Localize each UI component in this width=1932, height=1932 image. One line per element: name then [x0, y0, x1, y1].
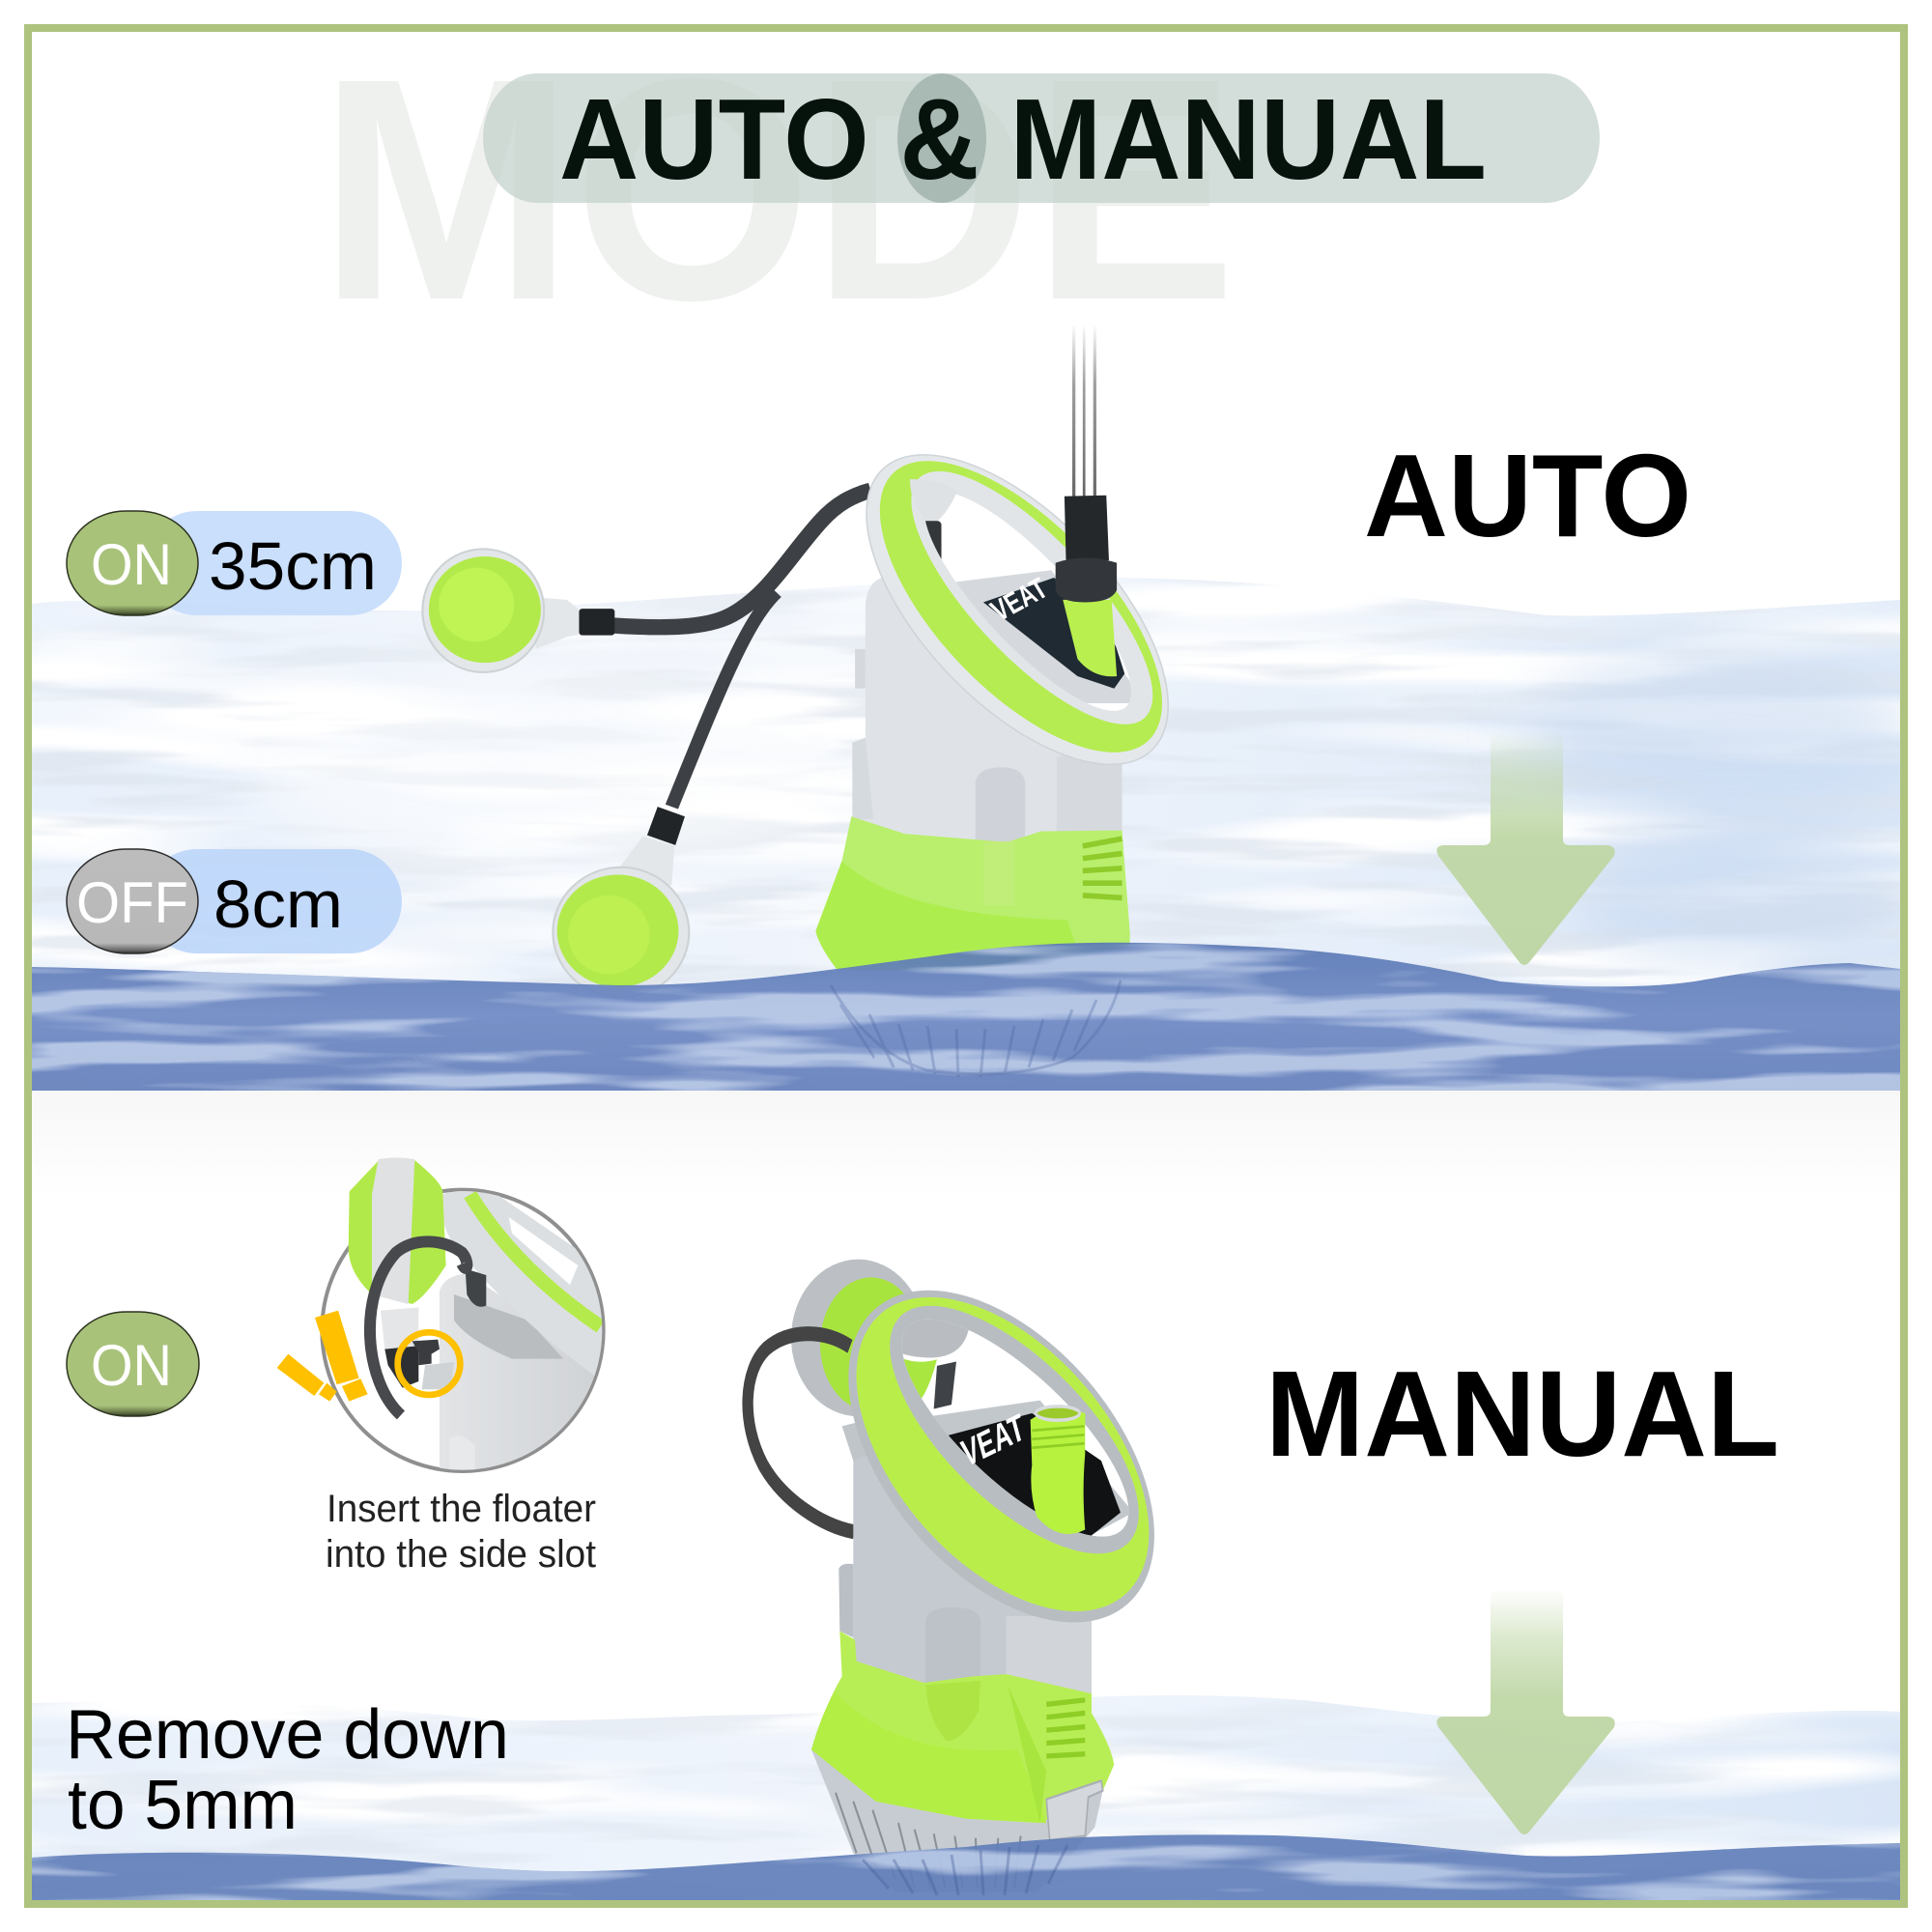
- inset contents: [440, 1190, 606, 1475]
- floater: [349, 1157, 446, 1388]
- float: lower: [553, 807, 689, 997]
- illustration: pump in manual mode: [742, 1260, 1154, 1888]
- cable loop: [748, 1334, 854, 1532]
- ring handle: [866, 454, 1169, 765]
- caption: insert the floater: into the side slot: [326, 1533, 596, 1576]
- value: 8cm: 8cm: [213, 867, 343, 942]
- text: remove down to 5mm: to 5mm: [68, 1767, 298, 1844]
- green base: [811, 1631, 1114, 1823]
- pump outlet and pipe: [1056, 324, 1117, 676]
- title pill: [483, 73, 1600, 204]
- ghost word MODE: MODE: [319, 14, 1236, 366]
- panel: deep water front: [32, 937, 1900, 1092]
- heading: AUTO: AUTO: [1364, 430, 1691, 561]
- floater cable: [370, 1241, 467, 1415]
- tag: ON 35cm: [67, 511, 402, 615]
- grill seen through manual water: [863, 1845, 1067, 1895]
- illustration: pump in auto mode with floats: [422, 324, 1222, 997]
- title: AUTO & MANUAL: AUTO & MANUAL: [559, 75, 1487, 204]
- tag: OFF 8cm: [67, 849, 402, 953]
- ring handle: [848, 1291, 1154, 1623]
- ring opening contents: [902, 1320, 1128, 1536]
- arrow: manual water level down: [1436, 1589, 1615, 1834]
- pump body: [852, 575, 1122, 900]
- panel: deep water manual: [32, 1834, 1900, 1900]
- pump grill seen through water: [831, 980, 1121, 1077]
- float behind: [791, 1260, 925, 1416]
- badge: OFF: [67, 849, 198, 953]
- logo text: VEAT: [957, 1406, 1029, 1475]
- badge: ON manual: ON: [91, 1333, 172, 1398]
- text: remove down to 5mm: [66, 1696, 509, 1844]
- panel: manual water surface: [32, 1695, 1900, 1871]
- ring opening contents: [921, 521, 1146, 703]
- badge: ON: [67, 511, 198, 615]
- panel: auto water surface: [32, 578, 1900, 987]
- logo text: VEAT: [984, 571, 1053, 628]
- grey bottom with grill: [811, 1749, 1103, 1892]
- clip latch: [1046, 1780, 1103, 1840]
- inset circle: [322, 1190, 604, 1471]
- badge: ON manual: [67, 1312, 199, 1416]
- icon: warning marks: [277, 1311, 368, 1402]
- pump green base: [815, 816, 1130, 972]
- arrow: auto water level down: [1436, 731, 1615, 965]
- caption: insert the floater: [326, 1488, 596, 1576]
- slot clip: [412, 1340, 454, 1389]
- text: remove down to 5mm: Remove down: [66, 1696, 509, 1774]
- caption: insert the floater: Insert the floater: [327, 1488, 596, 1530]
- detail inset: floater in side slot: [277, 1157, 606, 1475]
- faint band above manual panel: [32, 1091, 1900, 1197]
- badge: ON: ON: [91, 532, 172, 597]
- green outlet: [1031, 1406, 1085, 1534]
- pump body: [838, 1417, 1092, 1711]
- heading: MANUAL: MANUAL: [1265, 1346, 1779, 1482]
- cable: float to pump: [611, 491, 870, 627]
- float: upper: [422, 549, 614, 672]
- badge: OFF: OFF: [76, 870, 188, 935]
- cable: low float: [671, 592, 777, 807]
- handle lip: [910, 479, 957, 526]
- value: 35cm: 35cm: [209, 528, 377, 604]
- highlight ring: [398, 1332, 460, 1395]
